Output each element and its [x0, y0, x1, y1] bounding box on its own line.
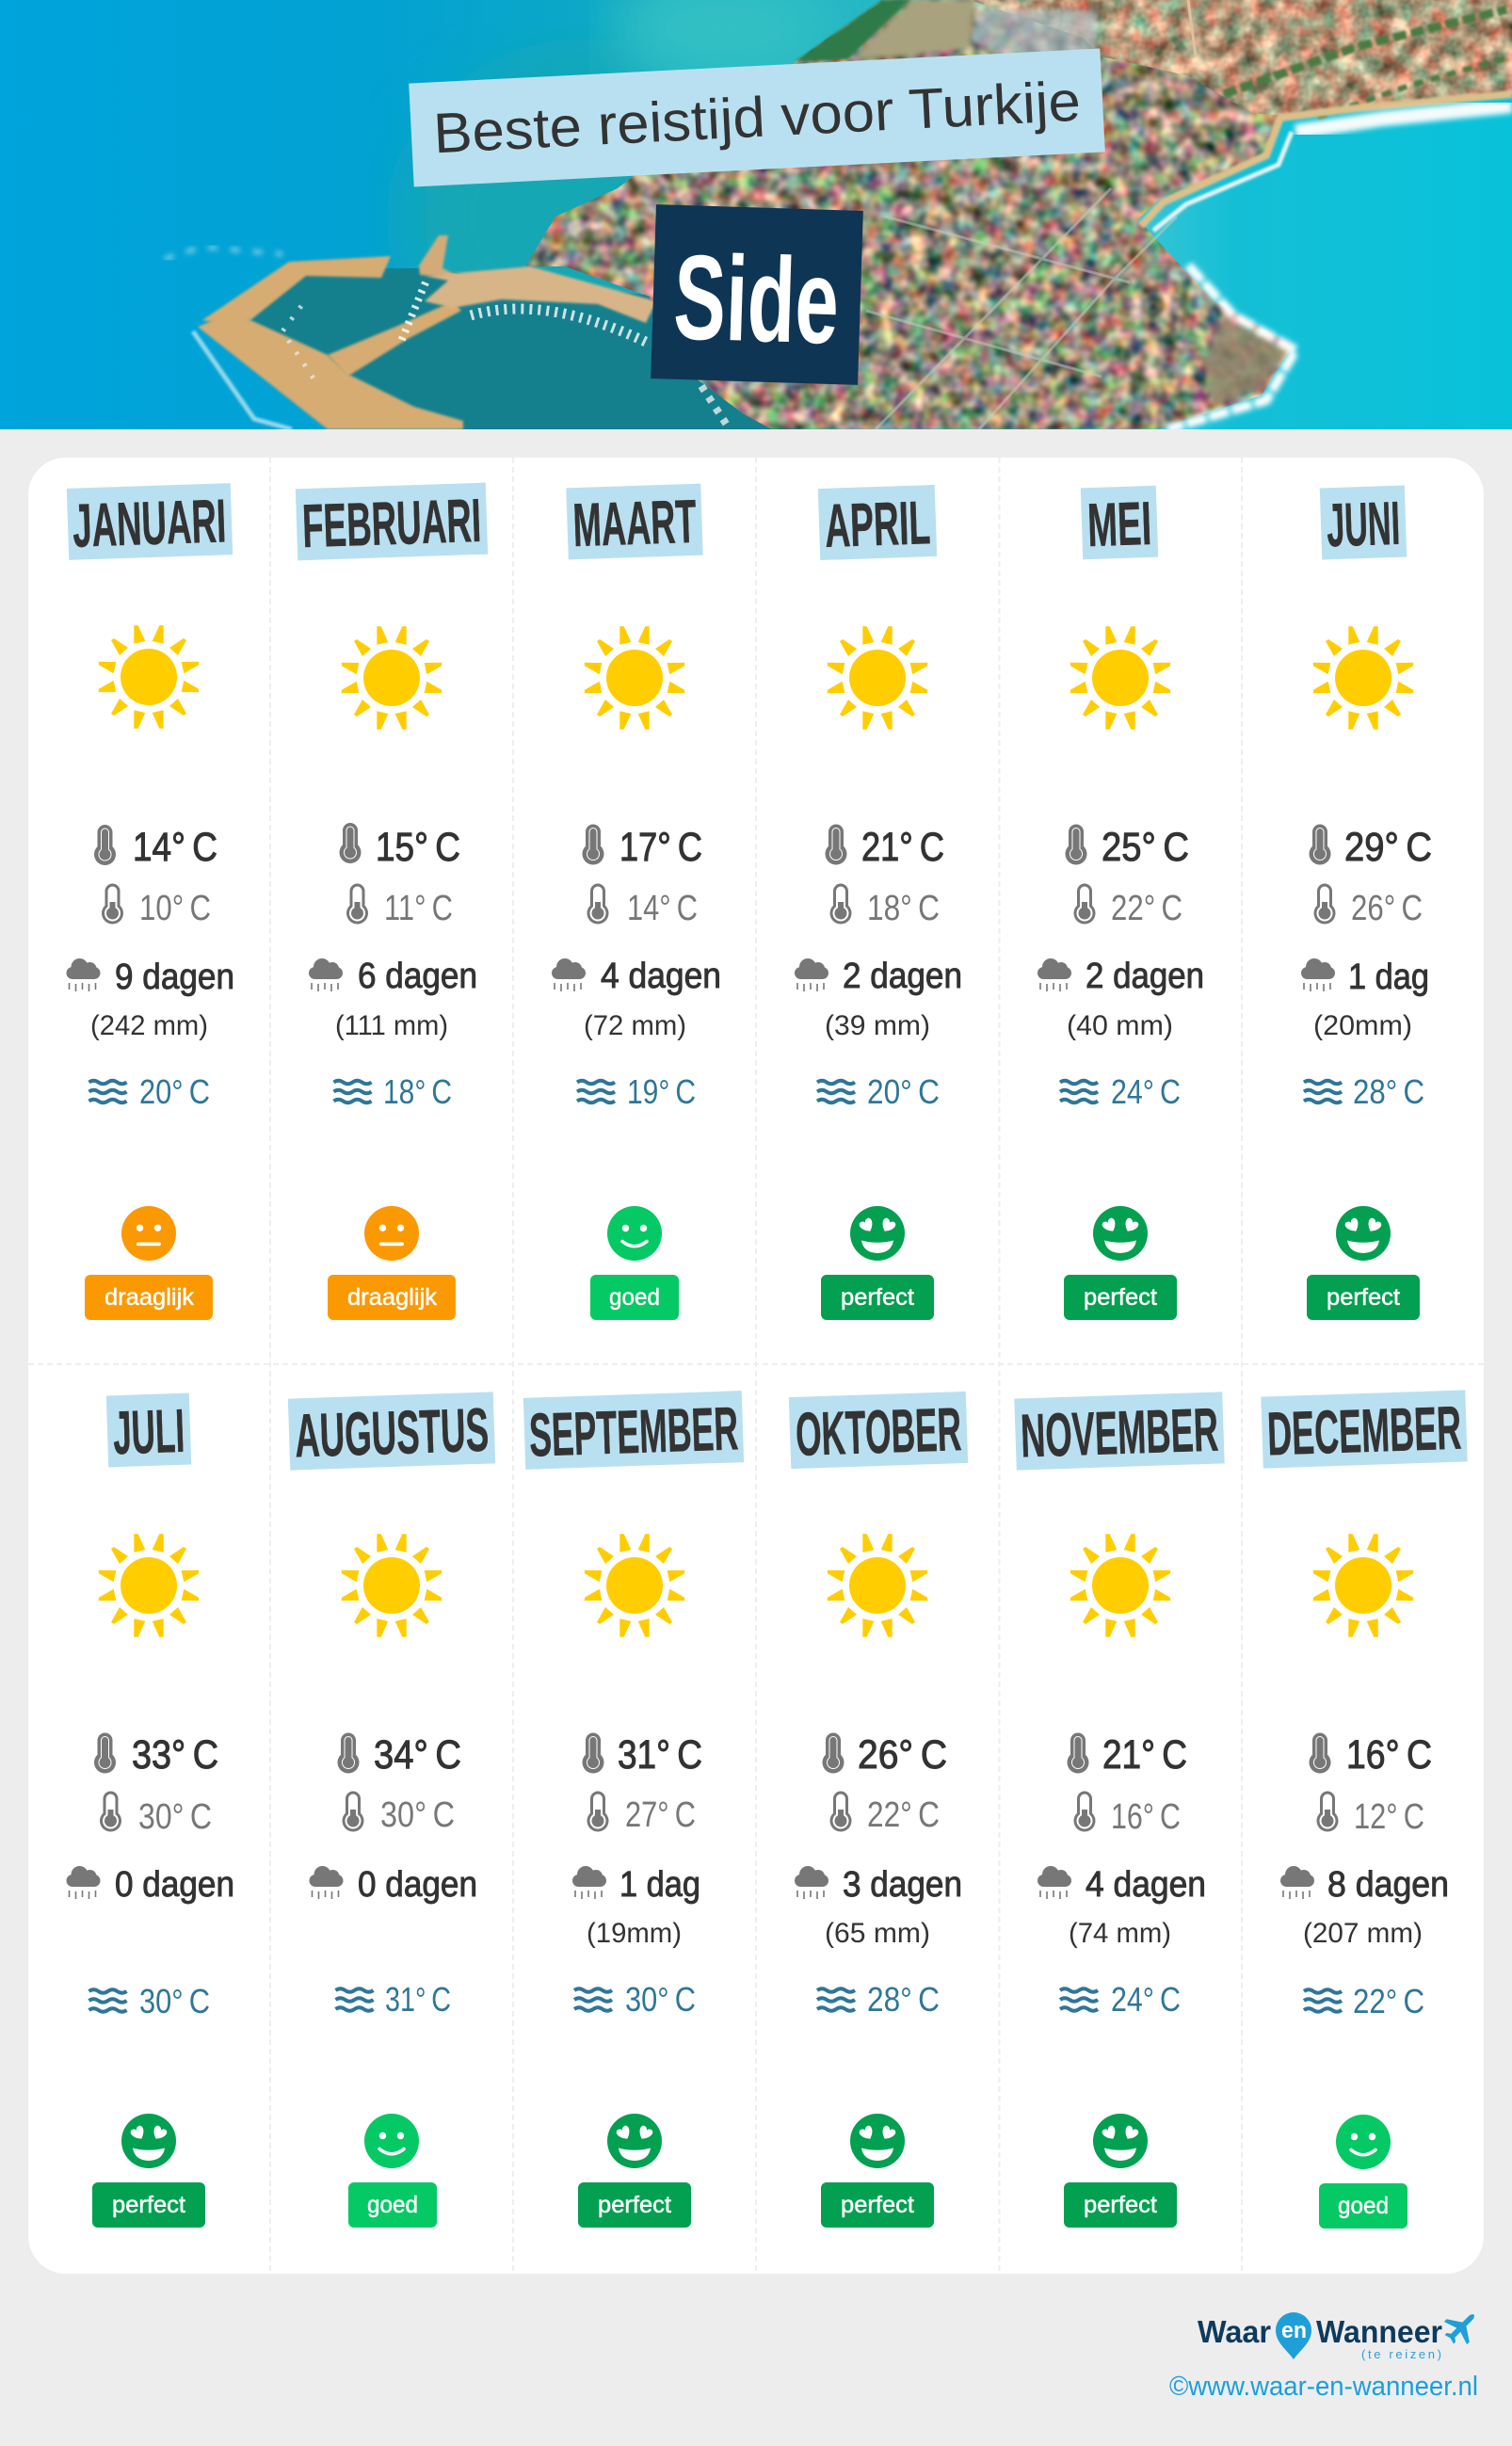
rainfall: (40 mm): [1067, 1010, 1173, 1041]
banner: destination name: Side: [672, 230, 841, 370]
max temperature: 33° C: [132, 1732, 218, 1778]
rain days: [1280, 1865, 1449, 1905]
max temperature: 16° C: [1346, 1732, 1432, 1778]
icon: sun: [342, 626, 442, 730]
copyright url: ©www.waar-en-wanneer.nl: [1169, 2372, 1478, 2402]
heading: juli: JULI: [112, 1396, 185, 1467]
heading: februari: FEBRUARI: [301, 486, 482, 560]
icon: sun: [1070, 626, 1170, 730]
sea temperature: 20° C: [139, 1072, 210, 1111]
rating: perfect: perfect: [1084, 1284, 1157, 1311]
max temperature: [823, 1732, 947, 1778]
heading: juni: JUNI: [1326, 489, 1401, 559]
max temperature: 21° C: [861, 825, 944, 870]
month: februari: [296, 483, 488, 1320]
max temperature: [1309, 1732, 1432, 1778]
icon: map pin: en: [1281, 2318, 1307, 2343]
rain days: [66, 957, 234, 997]
rain days: 0 dagen: [358, 1865, 477, 1905]
banner: title: [409, 48, 1105, 187]
min temperature: 30° C: [138, 1797, 212, 1837]
rainfall: (242 mm): [90, 1010, 208, 1041]
logo: Waar en Wanneer: Waar: [1198, 2314, 1271, 2349]
rating: perfect: [821, 2114, 934, 2228]
sea temperature: 28° C: [1353, 1072, 1424, 1111]
max temperature: 26° C: [858, 1732, 947, 1778]
rainfall: (19mm): [587, 1918, 682, 1949]
rating: perfect: [1307, 1206, 1420, 1320]
sea temperature: [817, 1980, 940, 2019]
max temperature: [582, 825, 702, 870]
rainfall: (39 mm): [825, 1010, 930, 1041]
min temperature: [1073, 883, 1182, 928]
rain days: [795, 957, 962, 996]
rating: perfect: perfect: [841, 2192, 914, 2218]
min temperature: 16° C: [1111, 1797, 1181, 1837]
rain days: [309, 957, 477, 996]
max temperature: [1309, 825, 1432, 870]
min temperature: [346, 883, 453, 928]
rain days: [552, 957, 721, 996]
min temperature: [343, 1791, 455, 1835]
min temperature: [830, 883, 940, 928]
icon: sun: [828, 626, 927, 730]
sea temperature: [1304, 1072, 1424, 1111]
icon: sun: [342, 1534, 442, 1637]
banner: title: Beste reistijd voor Turkije: [432, 70, 1082, 165]
min temperature: [1314, 883, 1423, 928]
min temperature: 30° C: [380, 1795, 455, 1835]
rating: perfect: [1064, 1206, 1177, 1320]
rain days: 8 dagen: [1327, 1865, 1449, 1905]
rating: goed: [348, 2114, 437, 2228]
max temperature: 25° C: [1102, 825, 1189, 870]
rating: perfect: [821, 1206, 934, 1320]
rain days: 2 dagen: [1086, 957, 1204, 996]
heading: januari: JANUARI: [72, 486, 227, 560]
icon: sun: [585, 626, 684, 730]
rain days: 2 dagen: [843, 957, 962, 996]
rating: perfect: [578, 2114, 691, 2228]
rating: perfect: perfect: [112, 2192, 185, 2218]
sea temperature: 31° C: [385, 1980, 451, 2019]
month: april: [795, 485, 962, 1320]
rating: perfect: perfect: [841, 1284, 914, 1311]
heading: september: [523, 1391, 744, 1470]
breakwater and harbour: [202, 256, 391, 325]
sea temperature: 24° C: [1111, 1072, 1181, 1111]
sea temperature: [1060, 1980, 1181, 2019]
min temperature: [587, 883, 698, 928]
heading: november: [1014, 1392, 1225, 1471]
sea temperature: 20° C: [867, 1072, 940, 1111]
heading: mei: MEI: [1086, 489, 1152, 559]
rating: goed: goed: [609, 1284, 660, 1311]
heading: november: NOVEMBER: [1020, 1395, 1219, 1470]
rainfall: (72 mm): [584, 1010, 686, 1041]
sea temperature: 22° C: [1353, 1982, 1424, 2020]
max temperature: [582, 1732, 702, 1778]
rating: perfect: perfect: [598, 2192, 671, 2218]
icon: sun: [1313, 1534, 1413, 1637]
rating: goed: goed: [367, 2192, 418, 2218]
banner: destination name: [651, 204, 863, 385]
month: augustus: [288, 1392, 495, 2228]
rating: perfect: [1064, 2114, 1177, 2228]
rain days: 6 dagen: [358, 957, 477, 996]
rain days: 1 dag: [1348, 957, 1429, 997]
panel: weather per month: [28, 458, 1484, 2274]
logo: Waar en Wanneer: [1198, 2303, 1486, 2361]
rating: goed: [1319, 2115, 1407, 2229]
rain days: 4 dagen: [601, 957, 721, 996]
rain days: [1037, 957, 1204, 996]
min temperature: [587, 1791, 696, 1835]
max temperature: 31° C: [618, 1732, 702, 1778]
heading: mei: [1081, 486, 1158, 559]
icon: sun: [99, 1534, 199, 1637]
rainfall: (20mm): [1313, 1010, 1412, 1041]
rating: goed: goed: [1338, 2193, 1389, 2219]
max temperature: [1066, 825, 1189, 870]
min temperature: 26° C: [1351, 889, 1423, 928]
month: september: [523, 1391, 744, 2228]
rating: draaglijk: [328, 1206, 456, 1320]
heading: oktober: [789, 1392, 968, 1469]
min temperature: 22° C: [1111, 889, 1182, 928]
max temperature: 34° C: [374, 1732, 461, 1778]
heading: juli: [106, 1393, 191, 1467]
sea temperature: [577, 1072, 696, 1111]
icon: sun: [828, 1534, 927, 1637]
min temperature: 22° C: [867, 1795, 940, 1835]
min temperature: [830, 1791, 940, 1835]
min temperature: 27° C: [625, 1795, 696, 1835]
heading: januari: [67, 483, 233, 560]
min temperature: 18° C: [867, 889, 940, 928]
rating: draaglijk: [85, 1206, 213, 1320]
max temperature: 29° C: [1344, 825, 1432, 870]
rating: perfect: perfect: [1084, 2192, 1157, 2218]
rainfall: (65 mm): [825, 1918, 930, 1949]
month: november: [1014, 1392, 1225, 2228]
rain days: 4 dagen: [1086, 1865, 1206, 1905]
rain days: 3 dagen: [843, 1865, 962, 1905]
rain days: 1 dag: [619, 1865, 700, 1905]
min temperature: [1316, 1791, 1424, 1837]
max temperature: 14° C: [133, 825, 217, 870]
icon: sun: [1313, 626, 1413, 730]
logo: Waar en Wanneer: (te reizen): [1361, 2347, 1441, 2361]
rain days: [1037, 1865, 1206, 1905]
sea temperature: [88, 1982, 210, 2020]
rating: goed: [590, 1206, 679, 1320]
rating: draaglijk: draaglijk: [105, 1284, 195, 1311]
heading: februari: [296, 483, 488, 560]
month: juli: [66, 1393, 234, 2228]
rain days: [572, 1865, 700, 1905]
heading: maart: MAART: [571, 487, 698, 559]
icon: plane: [1438, 2303, 1486, 2351]
icon: sun: [99, 625, 199, 729]
sea temperature: 18° C: [383, 1072, 452, 1111]
max temperature: 17° C: [619, 825, 702, 870]
heading: augustus: [288, 1392, 495, 1471]
sea temperature: [574, 1980, 696, 2019]
hero photo: aerial view of Side: [0, 0, 1512, 429]
min temperature: 11° C: [384, 889, 453, 928]
max temperature: [94, 825, 217, 870]
month: oktober: [789, 1392, 968, 2228]
min temperature: 12° C: [1354, 1797, 1424, 1837]
sea temperature: [1304, 1982, 1424, 2020]
min temperature: [1073, 1791, 1181, 1837]
max temperature: 21° C: [1102, 1732, 1187, 1778]
rain days: 0 dagen: [115, 1865, 234, 1905]
rainfall: (74 mm): [1069, 1918, 1171, 1949]
min temperature: 14° C: [627, 889, 698, 928]
rating: perfect: perfect: [1327, 1284, 1400, 1311]
heading: april: APRIL: [824, 488, 931, 560]
sea temperature: 30° C: [139, 1982, 210, 2020]
sea temperature: 28° C: [867, 1980, 940, 2019]
icon: sun: [1070, 1534, 1170, 1637]
rain days: [795, 1865, 962, 1905]
max temperature: [1068, 1732, 1187, 1778]
rating: perfect: [92, 2114, 205, 2228]
heading: april: [818, 485, 937, 560]
max temperature: 15° C: [376, 825, 460, 870]
sea temperature: [1060, 1072, 1181, 1111]
icon: sun: [585, 1534, 684, 1637]
logo: Waar en Wanneer: Wanneer: [1316, 2314, 1442, 2349]
max temperature: [339, 823, 460, 870]
sea temperature: [333, 1072, 452, 1111]
rainfall: (111 mm): [335, 1010, 448, 1041]
heading: juni: [1320, 486, 1407, 559]
rain days: [309, 1865, 477, 1905]
month: mei: [1037, 486, 1204, 1320]
max temperature: [825, 825, 944, 870]
rain days: [1301, 957, 1429, 997]
heading: maart: [566, 484, 703, 559]
rainfall: (207 mm): [1303, 1918, 1423, 1949]
sea temperature: 30° C: [625, 1980, 696, 2019]
heading: oktober: OKTOBER: [795, 1394, 962, 1469]
month: juni: [1301, 486, 1432, 1320]
month: januari: [66, 483, 234, 1320]
sea temperature: 24° C: [1111, 1980, 1181, 2019]
heading: september: SEPTEMBER: [528, 1393, 739, 1470]
min temperature: 10° C: [139, 889, 211, 928]
icon: map pin: [1276, 2312, 1311, 2359]
sea temperature: [817, 1072, 940, 1111]
rain days: [66, 1865, 234, 1905]
heading: augustus: AUGUSTUS: [294, 1395, 490, 1470]
sea temperature: 19° C: [627, 1072, 696, 1111]
sea temperature: [335, 1980, 451, 2019]
rain days: 9 dagen: [115, 957, 234, 997]
max temperature: [94, 1732, 218, 1778]
month: december: [1261, 1390, 1468, 2229]
min temperature: [100, 1791, 212, 1837]
month: maart: [552, 484, 721, 1320]
sea temperature: [88, 1072, 210, 1111]
min temperature: [102, 883, 211, 928]
rating: draaglijk: draaglijk: [347, 1284, 438, 1311]
max temperature: [337, 1732, 461, 1778]
